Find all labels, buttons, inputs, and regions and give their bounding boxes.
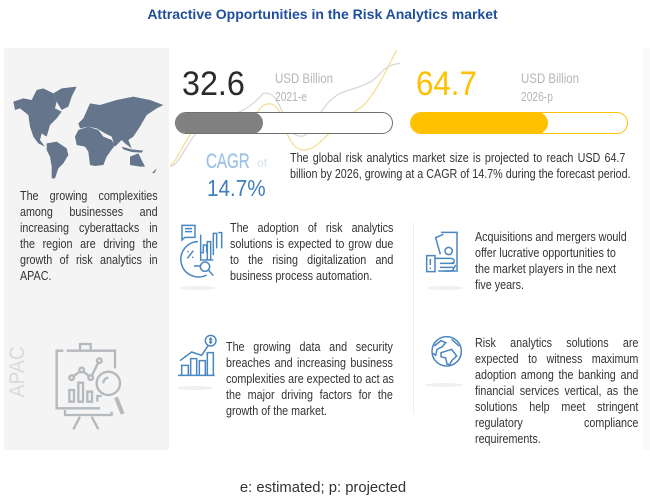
divider (413, 222, 414, 414)
text: banking insight: solutions help meet stringent (475, 400, 638, 414)
label: APAC: APAC (6, 346, 29, 397)
year: 2021-e (275, 90, 307, 104)
unit: USD Billion (521, 70, 579, 86)
text: market summary: The global risk analytics market size is projected to reach USD 64.7 (290, 151, 625, 165)
text: banking insight: adoption among the banking and (475, 368, 638, 382)
icon: globe (431, 336, 462, 367)
text: adoption insight: The adoption of risk analytics (230, 221, 393, 235)
text: adoption insight: to the rising digitalization and (230, 253, 393, 267)
panel: right margin tint (643, 48, 650, 450)
text: acquisitions insight: offer lucrative opportunities to (475, 246, 616, 260)
text: driving factors insight: The growing data and security (226, 340, 393, 354)
text: APAC description: among businesses and (20, 205, 158, 219)
icon: world map (13, 86, 164, 178)
year: 2026-p (521, 90, 553, 104)
progress bar: 2021 (175, 112, 393, 134)
text: acquisitions insight: the market players in the next (475, 262, 616, 276)
text: driving factors insight: the major driving factors for the (226, 388, 393, 402)
decoration: background trend lines (170, 50, 400, 168)
text: driving factors insight: growth of the market. (226, 404, 327, 418)
text: market summary (290, 151, 631, 181)
CAGR value: 14.7% (207, 175, 266, 201)
text: adoption insight (230, 221, 393, 283)
footnote: e: estimated; p: projected (240, 480, 406, 496)
panel: APAC region (4, 48, 169, 450)
text: acquisitions insight: Acquisitions and mergers would (475, 230, 627, 244)
progress bar: 2026 (410, 112, 628, 134)
text: banking insight (475, 336, 638, 446)
title: Attractive Opportunities in the Risk Analytics market (147, 6, 498, 22)
text: acquisitions insight (475, 230, 627, 292)
text: banking insight: requirements. (475, 432, 541, 446)
text: banking insight: financial services vertical, as the (475, 384, 638, 398)
icon: growth chart with dollar (178, 334, 217, 376)
stat: 2021 value (182, 65, 333, 104)
text: APAC description: The growing complexities (20, 189, 158, 203)
text: APAC description: APAC. (20, 269, 51, 283)
text: adoption insight: business process automation. (230, 269, 372, 283)
text: APAC description: growth of risk analytics in (20, 253, 158, 267)
icon: presentation board (56, 342, 124, 430)
of: of (257, 156, 267, 170)
text: banking insight: expected to witness maximum (475, 352, 638, 366)
icon shadows (178, 286, 462, 390)
text: driving factors insight (226, 340, 394, 418)
text: APAC description: increasing cyberattacks in (20, 221, 158, 235)
value 32.6: 32.6 (182, 65, 245, 103)
value 64.7: 64.7 (416, 65, 477, 103)
text: adoption insight: solutions is expected to grow due (230, 237, 393, 251)
icon: analytics report (180, 224, 222, 278)
CAGR callout (206, 150, 267, 201)
text: APAC description (20, 189, 158, 283)
text: driving factors insight: breaches and increasing business (226, 356, 393, 370)
CAGR label: CAGR (206, 150, 250, 173)
text: acquisitions insight: five years. (475, 278, 524, 292)
text: banking insight: regulatory compliance (475, 416, 638, 430)
unit: USD Billion (275, 70, 333, 86)
text: market summary: billion by 2026, growing at a CAGR of 14.7% during the forecast period. (290, 167, 631, 181)
text: APAC description: the region are driving the (20, 237, 158, 251)
text: banking insight: Risk analytics solutions are (475, 336, 638, 350)
icon: money in hand (426, 232, 458, 272)
text: driving factors insight: complexities are expected to act as (226, 372, 394, 386)
stat: 2026 value (416, 65, 579, 104)
